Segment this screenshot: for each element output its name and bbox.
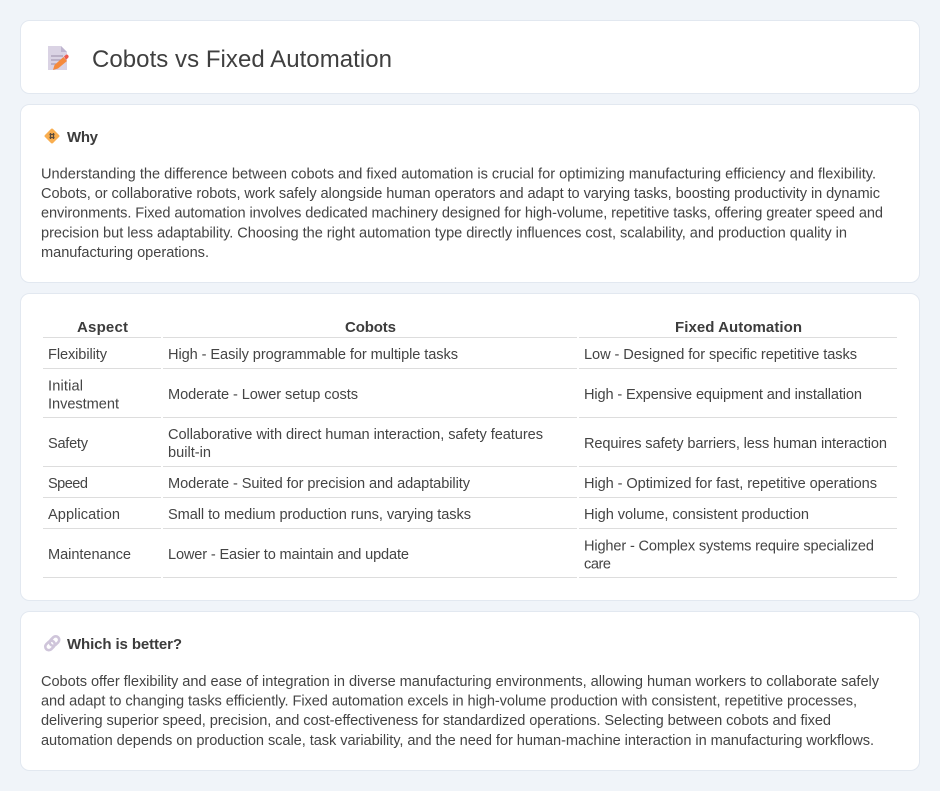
table row: speed: High - Optimized for fast, repetitive operations bbox=[584, 476, 877, 492]
panel: title header bbox=[20, 20, 920, 94]
table header row: Aspect bbox=[77, 319, 128, 336]
text block: verdict bbox=[41, 674, 880, 749]
table row: flexibility: Flexibility bbox=[48, 347, 108, 363]
icon: chain link bbox=[44, 635, 61, 652]
panel: why bbox=[20, 104, 920, 282]
table header row: Fixed Automation bbox=[675, 319, 802, 336]
table row: safety: Collaborative with direct human interaction, safety features bbox=[168, 427, 543, 443]
table row: flexibility bbox=[48, 347, 857, 363]
table row: safety: built-in bbox=[168, 445, 211, 461]
table row: initial investment: Moderate - Lower setup costs bbox=[168, 387, 358, 403]
text block: why explanation: Cobots, or collaborative robots, work safely alongside human operators and adapt to varying tasks, boosting productivity in dynamic bbox=[41, 186, 880, 202]
table row: safety: Safety bbox=[48, 436, 89, 452]
table row: maintenance: Higher - Complex systems require specialized bbox=[584, 538, 874, 554]
heading: why: Why bbox=[67, 129, 99, 146]
text block: verdict: delivering superior speed, precision, and cost-effectiveness for standardized operations. Selecting between cobots and fixed bbox=[41, 713, 831, 729]
table rules bbox=[43, 338, 897, 578]
icon: diamond sign bbox=[44, 128, 60, 144]
icon: memo with pencil bbox=[48, 46, 69, 70]
table row: application: High volume, consistent production bbox=[584, 507, 809, 523]
text block: why explanation: Understanding the difference between cobots and fixed automation is crucial for optimizing manufacturing efficiency and flexibility. bbox=[41, 166, 876, 182]
table row: speed bbox=[48, 476, 877, 492]
table row: application: Small to medium production runs, varying tasks bbox=[168, 507, 471, 523]
table row: initial investment: Investment bbox=[48, 396, 119, 412]
panel: comparison table bbox=[20, 294, 920, 600]
title: Cobots vs Fixed Automation bbox=[92, 46, 392, 73]
table row: maintenance bbox=[48, 538, 874, 572]
table row: application bbox=[48, 507, 809, 523]
table row: initial investment: High - Expensive equipment and installation bbox=[584, 387, 862, 403]
heading: which is better: Which is better? bbox=[67, 636, 182, 653]
text block: verdict: Cobots offer flexibility and ease of integration in diverse manufacturing environments, allowing human workers to collaborate safely bbox=[41, 674, 880, 690]
table row: flexibility: Low - Designed for specific repetitive tasks bbox=[584, 347, 857, 363]
table header row bbox=[77, 319, 802, 336]
text block: why explanation: precision but less adaptability. Choosing the right automation type directly influences cost, scalability, and production quality in bbox=[41, 225, 847, 241]
table row: initial investment: Initial bbox=[48, 378, 83, 394]
text block: verdict: and adapt to changing tasks efficiently. Fixed automation excels in high-volume production with consistent, repetitive processes, bbox=[41, 694, 857, 710]
table row: maintenance: Maintenance bbox=[48, 547, 131, 563]
table row: initial investment bbox=[48, 378, 862, 412]
text block: why explanation: environments. Fixed automation involves dedicated machinery designed for high-volume, repetitive tasks, offering greater speed and bbox=[41, 206, 883, 222]
table row: speed: Moderate - Suited for precision and adaptability bbox=[168, 476, 471, 492]
table row: flexibility: High - Easily programmable for multiple tasks bbox=[168, 347, 458, 363]
text block: why explanation bbox=[41, 166, 883, 261]
panel: which is better bbox=[20, 612, 920, 770]
text block: verdict: automation depends on production scale, task variability, and the need for human-machine interaction in manufacturing workflows. bbox=[41, 733, 874, 749]
table row: application: Application bbox=[48, 507, 120, 523]
table row: safety: Requires safety barriers, less human interaction bbox=[584, 436, 887, 452]
table header row: Cobots bbox=[345, 319, 396, 336]
table row: maintenance: care bbox=[584, 556, 611, 572]
table row: safety bbox=[48, 427, 887, 461]
table row: speed: Speed bbox=[48, 476, 88, 492]
text block: why explanation: manufacturing operations. bbox=[41, 245, 209, 261]
table row: maintenance: Lower - Easier to maintain and update bbox=[168, 547, 409, 563]
